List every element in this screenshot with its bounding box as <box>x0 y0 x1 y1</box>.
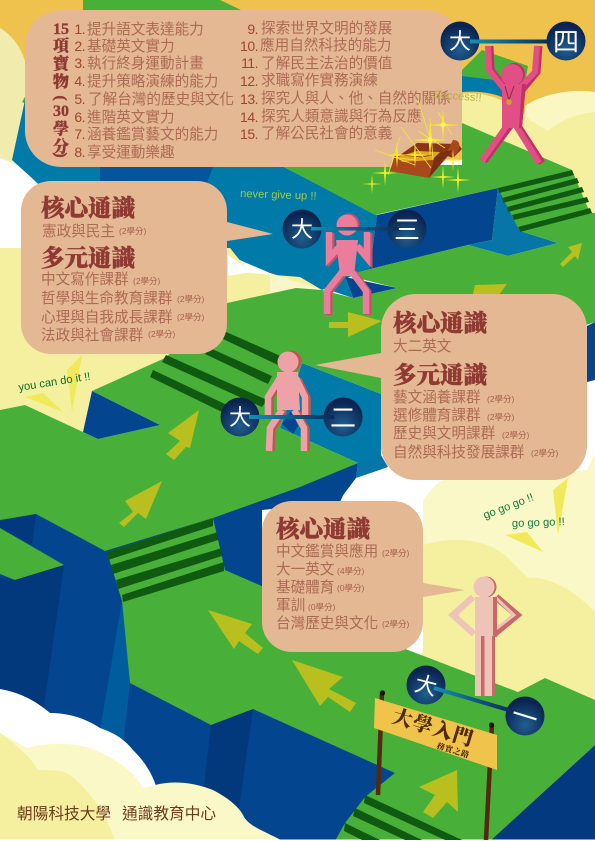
vertical title: 分 <box>53 137 69 156</box>
text: go go go: go go go !! <box>512 516 565 530</box>
vertical title: 30 <box>53 103 69 120</box>
left list: 4. <box>74 73 85 89</box>
left list: 進階英文實力 <box>87 108 175 126</box>
left list: 1. <box>74 21 85 37</box>
vertical title: 物 <box>53 72 69 91</box>
figure: sophomore <box>268 350 308 451</box>
dark lower cliffs <box>0 463 400 841</box>
bubble: sophomore courses: 選修體育課群 <box>393 407 481 424</box>
barbell: senior <box>440 22 586 60</box>
spark right <box>553 478 568 535</box>
vertical title: ) <box>52 152 69 158</box>
bubble: junior courses: 中文寫作課群 <box>41 270 129 288</box>
left list: 5. <box>74 91 85 107</box>
barbell: freshman: 一 <box>508 699 542 735</box>
right list: 15. <box>240 126 258 142</box>
left list: 涵養鑑賞藝文的能力 <box>87 125 218 143</box>
barbell: junior <box>282 210 426 248</box>
barbell: junior: 三 <box>394 215 420 245</box>
right list: 14. <box>240 109 258 125</box>
barbell: sophomore: 二 <box>330 403 356 433</box>
footer: organisation: 朝陽科技大學 <box>17 806 111 823</box>
barbell: freshman <box>406 666 544 736</box>
bubble: junior courses: (2學分) <box>133 276 161 286</box>
bubble: freshman courses: 台灣歷史與文化 <box>276 615 378 632</box>
bubble: junior courses: (2學分) <box>177 294 205 304</box>
arrow: up left large <box>292 660 356 712</box>
left list: 7. <box>74 126 85 142</box>
left list: 6. <box>74 109 85 125</box>
bubble: freshman courses: (0學分) <box>308 602 336 612</box>
staircase: lower left <box>107 518 224 602</box>
bubble: junior courses: (2學分) <box>148 329 176 339</box>
top right cream cloud <box>520 91 595 240</box>
bubble: freshman courses: (0學分) <box>337 583 365 593</box>
bubble: freshman courses: (2學分) <box>382 619 410 629</box>
staircase: upper right <box>498 170 592 232</box>
right list: 探索世界文明的發展 <box>261 20 393 37</box>
bubble: freshman courses: (4學分) <box>337 566 365 576</box>
bubble: sophomore courses: (2學分) <box>487 394 515 404</box>
bubble: junior courses <box>21 181 273 354</box>
left list <box>74 21 234 161</box>
barbell: sophomore <box>220 398 362 436</box>
arrow: up by sign <box>419 770 458 818</box>
figure: freshman <box>453 576 517 696</box>
medal <box>505 86 514 100</box>
bubble: sophomore courses <box>315 294 587 480</box>
footer: organisation: 通識教育中心 <box>122 804 216 823</box>
bubble: sophomore courses: (2學分) <box>487 412 515 422</box>
arrow: lower up right <box>119 481 162 527</box>
mid and lower plateau <box>0 213 595 551</box>
bubble: junior courses: 憲政與民主 <box>42 222 115 240</box>
right list: 應用自然科技的能力 <box>260 36 391 54</box>
arrow: behind bubble <box>472 284 507 298</box>
barbell: senior: 四 <box>553 27 579 57</box>
left list: 提升語文表達能力 <box>87 21 204 38</box>
bubble: junior courses: 哲學與生命教育課群 <box>41 289 173 307</box>
bubble: freshman courses: 中文鑑賞與應用 <box>276 542 378 560</box>
left list: 基礎英文實力 <box>87 37 175 55</box>
bubble: freshman courses: (2學分) <box>382 548 410 558</box>
bubble: junior courses: (2學分) <box>119 226 147 236</box>
teal upper gorge <box>12 100 377 290</box>
vertical title: 15 <box>53 21 69 38</box>
sparkles <box>375 100 458 175</box>
text: go go go <box>482 492 565 530</box>
bubble: freshman courses: 核心通識 <box>276 515 372 543</box>
bubble: freshman courses: 基礎體育 <box>276 579 334 596</box>
barbell: sophomore: 大 <box>229 405 251 430</box>
left list: 2. <box>74 38 85 54</box>
mid left cloud <box>0 248 322 432</box>
arrows <box>119 243 582 818</box>
success text: Success!! <box>433 89 482 104</box>
staircase: bottom <box>344 795 462 840</box>
left list: 提升策略演練的能力 <box>87 72 218 90</box>
left list: 享受運動樂趣 <box>87 144 175 161</box>
signpost: 務實之路 <box>435 740 471 760</box>
bubble: freshman courses: 大一英文 <box>276 561 335 578</box>
text: go go go: go go go !! <box>482 492 535 522</box>
gorge mid <box>280 363 381 463</box>
bubble: freshman courses <box>262 501 465 652</box>
exclamation sparks <box>25 355 568 552</box>
arrow: small top right <box>560 243 582 267</box>
bubble: junior courses: 多元通識 <box>41 245 137 272</box>
arrow: middle up right <box>166 410 199 460</box>
right list: 11. <box>241 55 258 71</box>
vertical title <box>52 21 70 158</box>
bubble: sophomore courses: (2學分) <box>531 448 559 458</box>
bubble: junior courses: (2學分) <box>177 312 205 322</box>
signpost <box>374 690 497 840</box>
icon: treasure chest <box>362 100 471 194</box>
figure: senior year weightlifter <box>482 46 542 163</box>
right list: 10. <box>240 38 258 54</box>
barbell: freshman: 大 <box>412 671 440 700</box>
figure: junior year <box>327 214 369 315</box>
signpost: 大學入門 <box>390 704 477 751</box>
vertical title: 學 <box>52 119 69 138</box>
right list <box>240 20 451 142</box>
bubble: fifteen treasures <box>25 10 461 167</box>
vertical title: ( <box>52 95 69 101</box>
bubble: junior courses: 法政與社會課群 <box>41 327 144 344</box>
upper plateau <box>280 123 572 215</box>
staircase: middle <box>150 331 285 412</box>
vertical title: 寶 <box>53 54 70 73</box>
right list: 9. <box>247 21 258 37</box>
bubble: sophomore courses: 藝文涵養課群 <box>393 388 481 406</box>
arrow: up left small <box>208 610 263 654</box>
bubble: junior courses: 心理與自我成長課群 <box>41 309 173 326</box>
bubble: junior courses: 核心通識 <box>41 194 137 222</box>
right list: 探究人與人、他、自然的關係 <box>261 89 451 107</box>
bubble: sophomore courses: (2學分) <box>502 430 530 440</box>
barbell: junior: 大 <box>291 217 313 242</box>
text: you can do it: you can do it !! <box>18 371 91 394</box>
left list: 執行終身運動計畫 <box>87 55 204 72</box>
right clouds <box>423 453 595 640</box>
right list: 了解民主法治的價值 <box>261 55 392 72</box>
left list: 3. <box>74 55 85 71</box>
bottom left clouds <box>0 630 170 841</box>
bubble: sophomore courses: 大二英文 <box>393 338 452 355</box>
right list: 探究人類意識與行為反應 <box>261 107 422 125</box>
bottom plateau <box>122 570 595 841</box>
right list: 12. <box>240 73 258 89</box>
right list: 求職寫作實務演練 <box>261 71 378 89</box>
cliff faces <box>0 514 36 545</box>
spark left <box>67 355 82 412</box>
vertical title: 項 <box>53 36 70 55</box>
right list: 了解公民社會的意義 <box>261 124 393 142</box>
bubble: sophomore courses: 歷史與文明課群 <box>393 425 496 442</box>
bubble: freshman courses: 軍訓 <box>276 597 305 614</box>
bubble: sophomore courses: 多元通識 <box>393 362 489 389</box>
left list: 了解台灣的歷史與文化 <box>88 91 234 108</box>
right list: 13. <box>240 91 258 107</box>
bubble: sophomore courses: 自然與科技發展課群 <box>393 444 525 461</box>
text: never give up: never give up !! <box>240 188 317 203</box>
arrow: pointing right <box>329 312 382 337</box>
left list: 8. <box>74 144 85 160</box>
barbell: senior: 大 <box>449 29 471 54</box>
bubble: sophomore courses: 核心通識 <box>393 309 489 337</box>
